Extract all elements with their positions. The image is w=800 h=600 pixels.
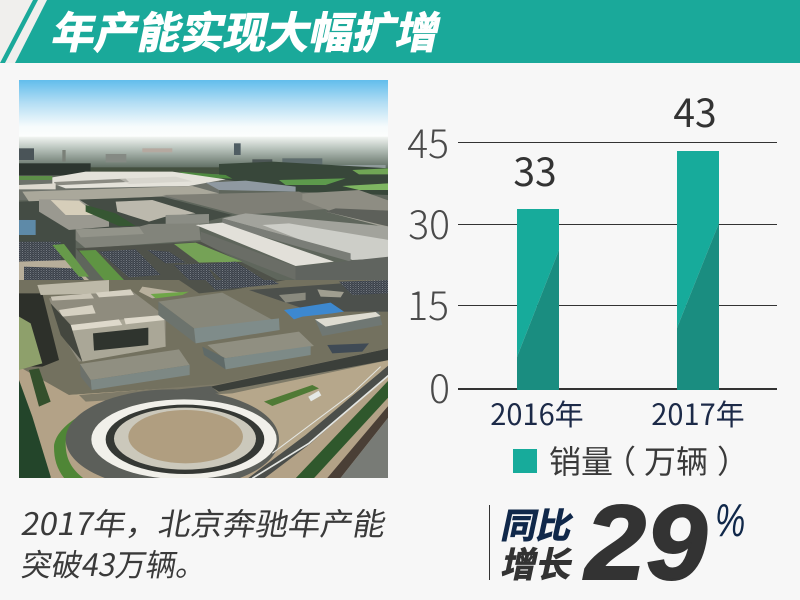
x axis labels: 2016年: [490, 392, 584, 434]
y axis labels: 15: [407, 276, 449, 332]
y axis labels: 0: [429, 359, 450, 415]
y axis labels: [407, 114, 450, 415]
legend: 万辆: [644, 437, 708, 483]
road behind track: [79, 348, 389, 402]
warehouses: [158, 293, 279, 328]
legend: ）: [717, 437, 749, 483]
callout label: 增长: [498, 537, 578, 588]
callout label: 同比: [498, 498, 578, 549]
caption text: [18, 499, 390, 585]
y axis labels: 30: [408, 195, 450, 251]
office building: [49, 290, 166, 362]
grass edge of track: [54, 418, 83, 478]
bar chart: [407, 83, 777, 483]
growth callout: [490, 484, 745, 600]
lower plant area and test track: [19, 280, 389, 489]
x axis labels: [490, 392, 745, 434]
bar 2016: 33: [517, 209, 559, 390]
value labels: 43: [673, 83, 717, 139]
bar 2017: 43: [677, 151, 719, 390]
upper plant area: [19, 137, 389, 280]
blue roof: [284, 303, 344, 319]
title: 年产能实现大幅扩增: [47, 0, 447, 61]
caption text: 突破43万辆。: [18, 540, 211, 585]
header banner: [0, 0, 800, 63]
legend: （: [604, 437, 636, 483]
trees left: [19, 380, 51, 480]
x axis labels: 2017年: [651, 392, 745, 434]
sky: [19, 80, 388, 138]
y axis labels: 45: [407, 114, 449, 170]
percent sign: %: [715, 494, 745, 546]
ground behind buildings: [19, 280, 389, 395]
distant city: [19, 148, 34, 160]
tan ground in front of buildings: [70, 390, 140, 395]
grid lines: [458, 142, 777, 306]
value labels: [513, 83, 717, 198]
caption text: 2017年，北京奔驰年产能: [18, 499, 390, 544]
legend: 销量: [549, 437, 613, 483]
callout label: [498, 498, 578, 588]
value labels: 33: [513, 142, 557, 198]
exit road: [246, 365, 389, 480]
test track: [66, 389, 279, 478]
legend: [513, 437, 749, 483]
aerial photo of factory: [19, 80, 389, 489]
highway and trees right: [294, 380, 389, 480]
percentage value: 29: [583, 484, 707, 600]
